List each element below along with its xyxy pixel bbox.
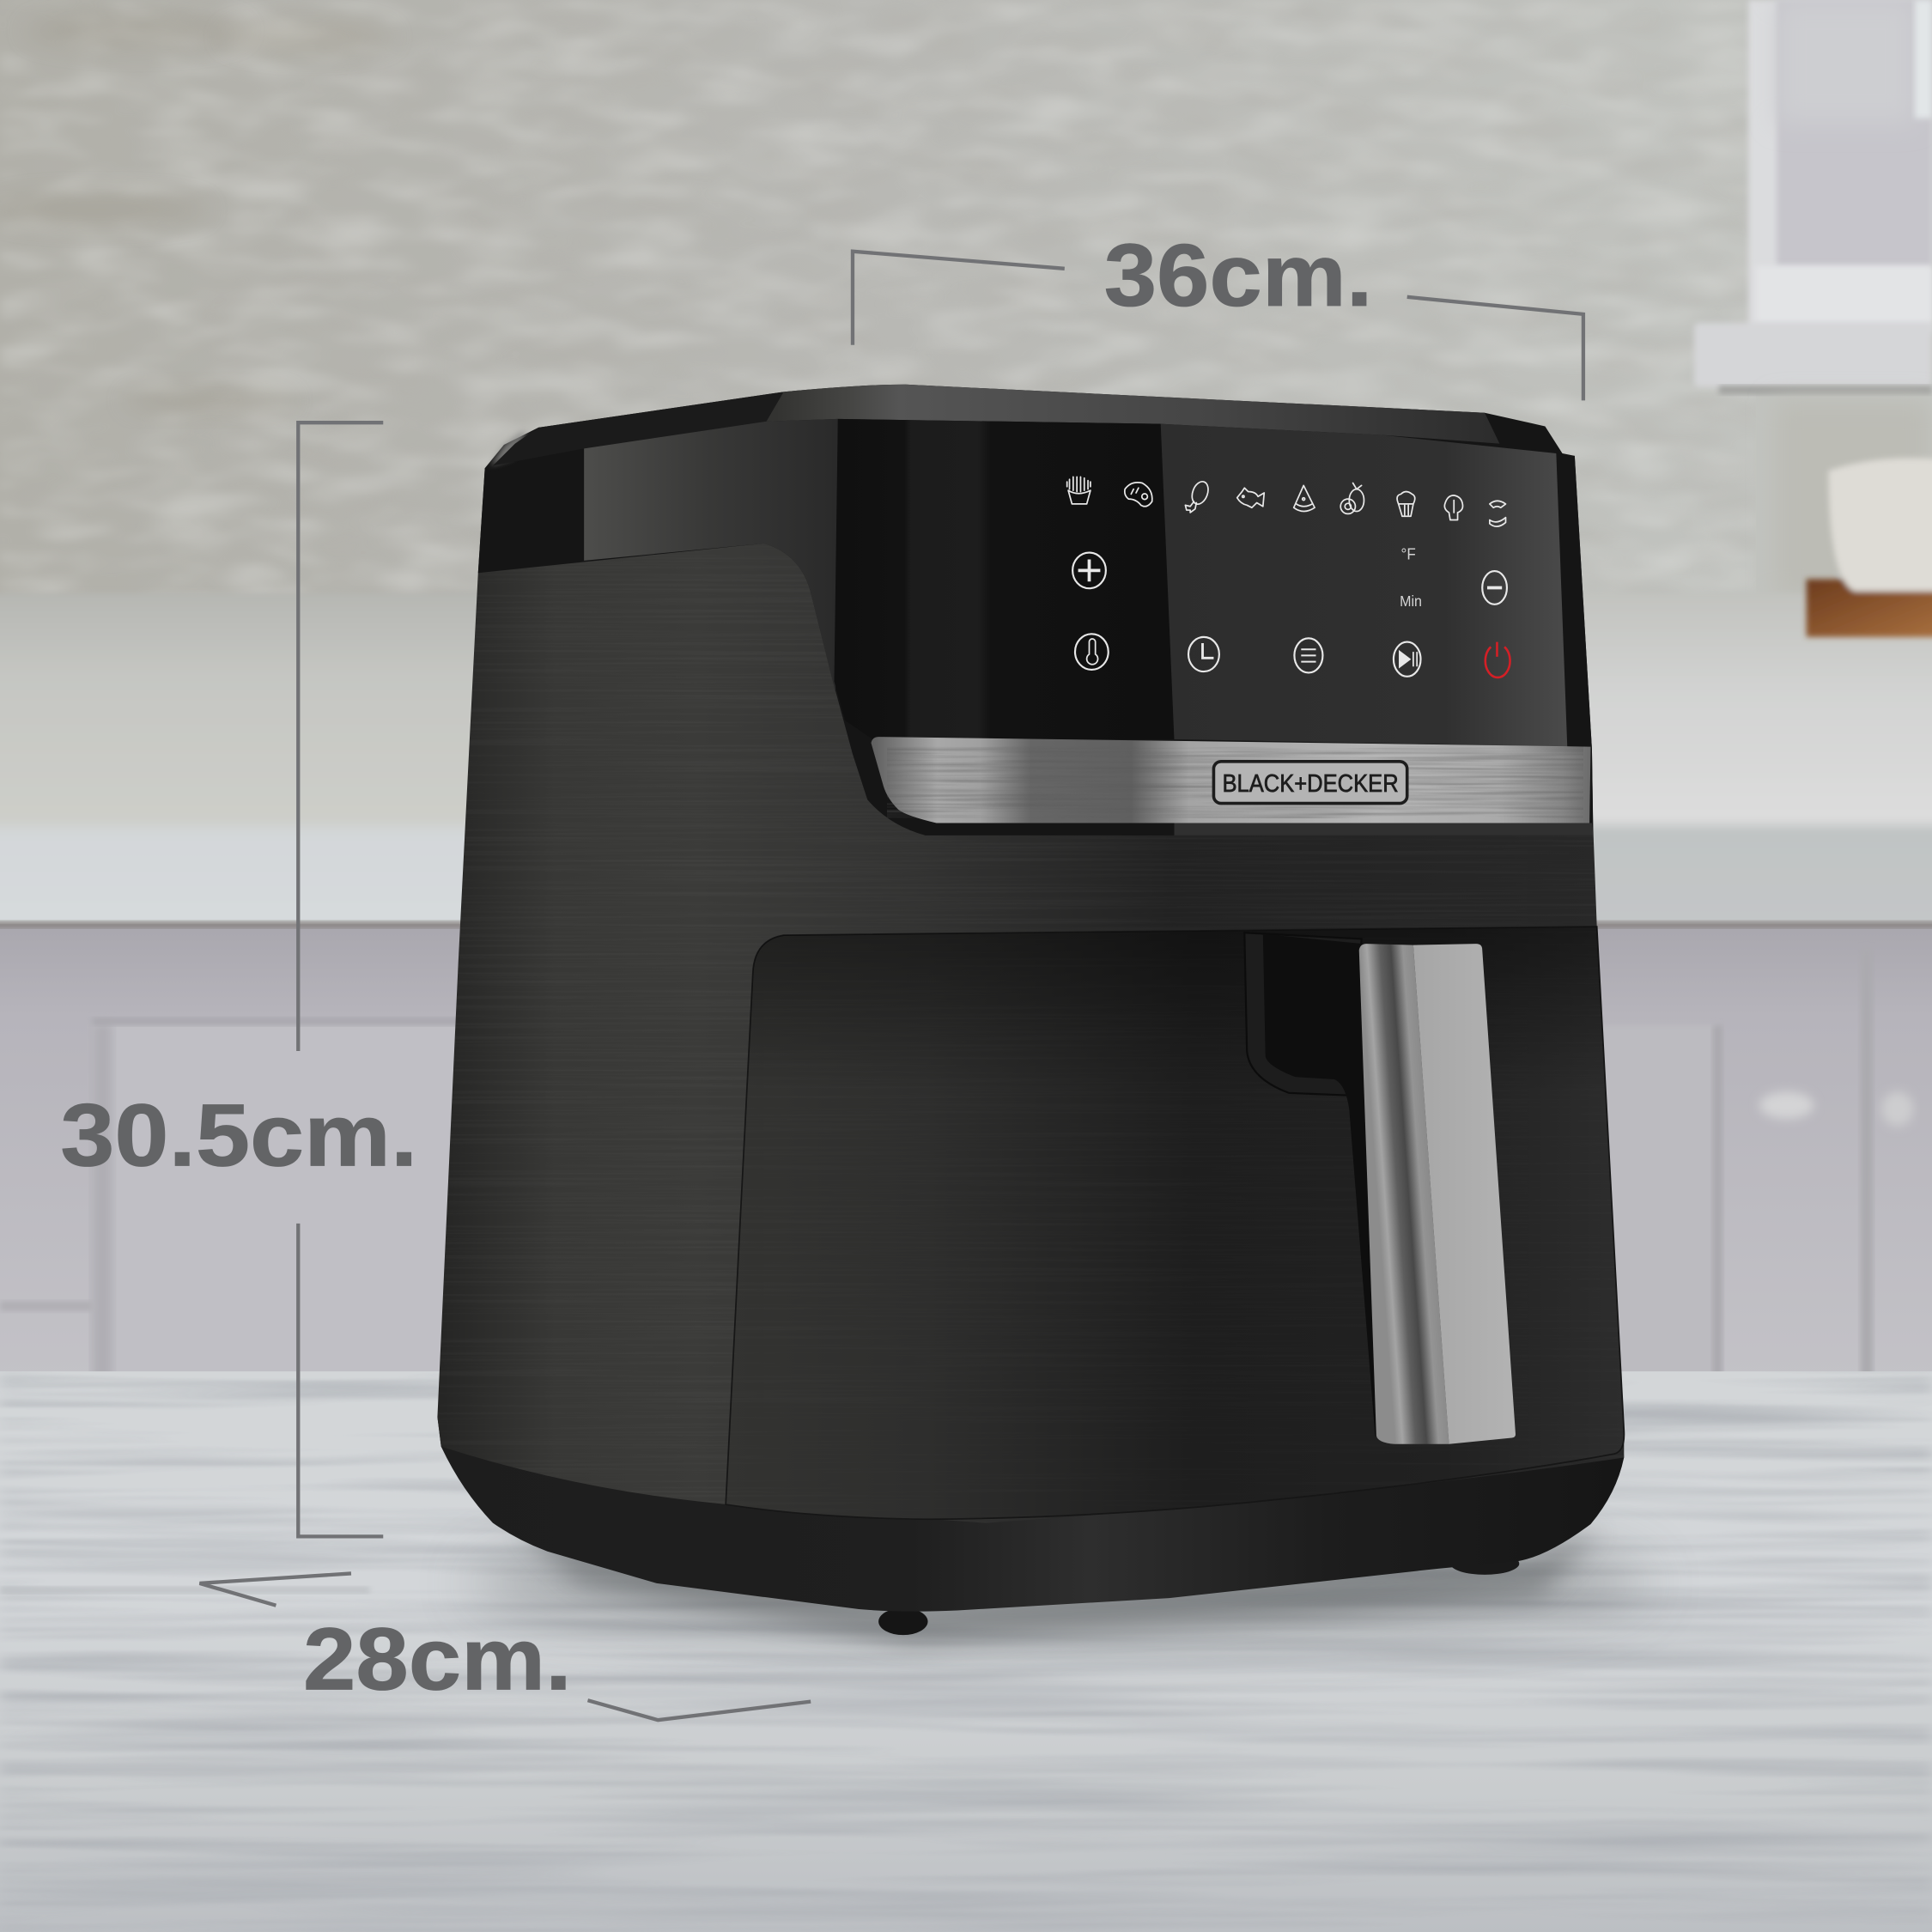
label: 28cm. (303, 1608, 572, 1708)
handle dark face (1359, 944, 1449, 1444)
left fascia (834, 419, 1175, 739)
steel handle (1359, 944, 1516, 1444)
lower strip below band (1175, 823, 1593, 835)
icon: muffin (1397, 492, 1415, 516)
background: stone wall (0, 0, 1932, 604)
icon: steak (1125, 483, 1152, 507)
brushed texture (431, 542, 1626, 1528)
background: wall below shelf (1774, 400, 1932, 598)
lid top (767, 385, 1499, 444)
glossy upper housing (478, 385, 1593, 835)
icon: broccoli (1444, 495, 1463, 520)
icon: lemon (1340, 483, 1364, 513)
unit label F: °F (1401, 544, 1416, 562)
button: timer (1188, 637, 1219, 671)
air fryer (431, 385, 1632, 1635)
bracket (199, 1573, 811, 1720)
label: 30.5cm. (60, 1084, 417, 1184)
glossy reflection left (584, 419, 838, 692)
touch buttons (1072, 553, 1510, 677)
unit label Min: Min (1400, 592, 1422, 610)
icon: fish (1237, 488, 1264, 507)
icon: chicken leg (1185, 479, 1211, 513)
logo badge: BLACK+DECKER (1222, 770, 1399, 798)
bracket (853, 252, 1583, 400)
fryer main body (437, 456, 1624, 1523)
lid corner highlight (490, 431, 527, 465)
stainless band (872, 737, 1591, 823)
bracket (298, 422, 383, 1536)
control panel right (1161, 424, 1567, 747)
icon: rotate arrows (1490, 501, 1506, 526)
button: play pause (1394, 642, 1420, 677)
background: bowl on cutting board (1807, 458, 1932, 637)
fryer feet (878, 1552, 1519, 1635)
background: cabinets (0, 921, 1932, 1380)
fryer shadow on counter (468, 1528, 1651, 1645)
button: power (1485, 642, 1510, 677)
fryer base (437, 1355, 1624, 1612)
logo badge (1213, 762, 1407, 804)
icon: fries (1067, 477, 1091, 504)
lid dark strip (493, 392, 784, 465)
button: minus (1482, 571, 1507, 605)
handle light face (1413, 944, 1516, 1444)
background: window and shelf (1694, 0, 1932, 394)
dimension: height (60, 422, 417, 1536)
button: plus (1072, 553, 1106, 588)
label: 36cm. (1104, 225, 1373, 325)
dimension: depth (199, 1573, 811, 1720)
cooking preset icons (1067, 477, 1506, 526)
button: menu (1294, 638, 1322, 672)
handle stem (1263, 934, 1382, 1442)
fryer drawer (720, 924, 1632, 1528)
button: temperature (1075, 634, 1109, 670)
dimension: width (853, 225, 1583, 400)
background: rear counter (0, 594, 1932, 924)
icon: watermelon (1294, 485, 1315, 512)
handle recess (1244, 933, 1362, 1096)
background: foreground countertop (0, 1371, 1932, 1932)
